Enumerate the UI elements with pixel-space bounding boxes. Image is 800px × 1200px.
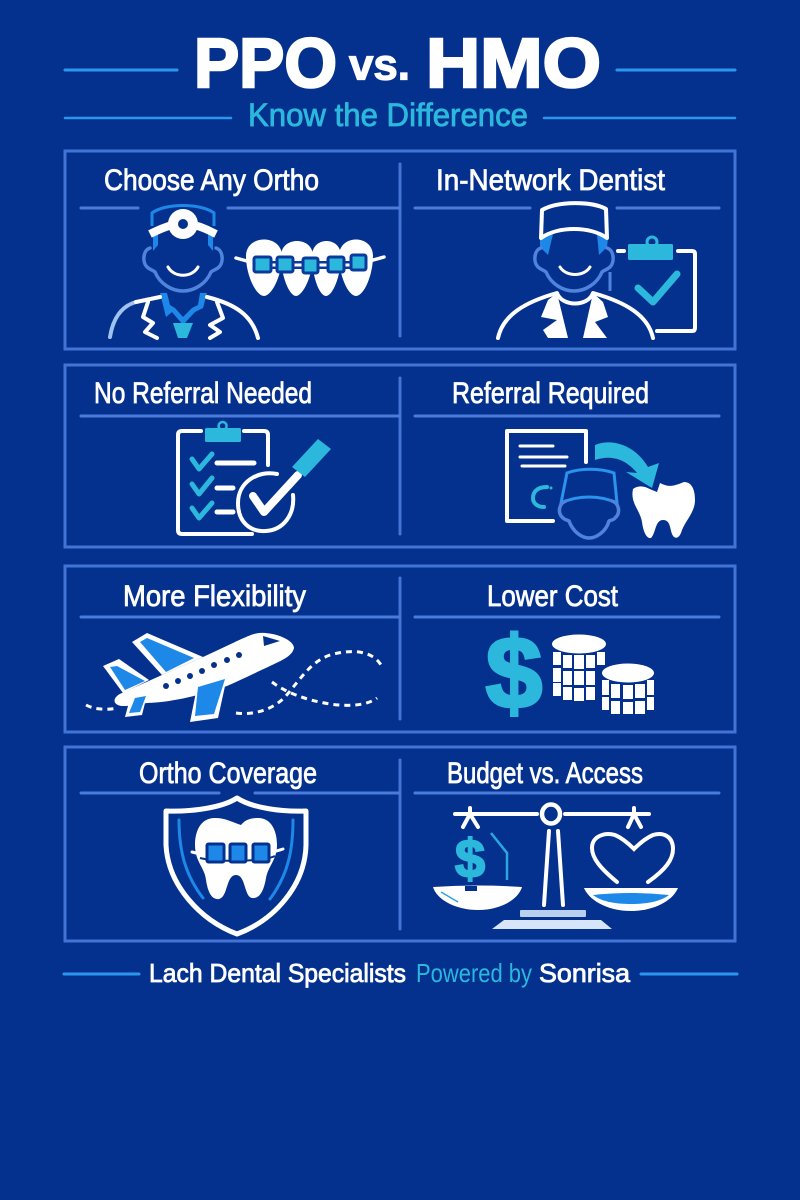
icon: dollar sign and coin stacks: $: [486, 616, 542, 730]
panel: referral: [65, 365, 735, 547]
heading: Ortho Coverage: Ortho Coverage: [139, 757, 317, 790]
title: vs.: [349, 40, 410, 90]
subtitle: Know the Difference: [248, 97, 528, 133]
icon: braces on teeth: [236, 240, 384, 296]
heading: Referral Required: Referral Required: [452, 377, 649, 410]
icon: shield with braced tooth: [166, 798, 306, 934]
icon: referral document, dentist, arrow and tooth: [507, 431, 695, 538]
icon: checklist clipboard with pen: [178, 422, 331, 534]
footer: Lach Dental Specialists: [149, 958, 406, 988]
title: HMO: [426, 24, 601, 102]
panel: coverage and budget: [65, 747, 735, 941]
icon: airplane with dashed flight path: [86, 633, 381, 722]
footer: Powered by: [416, 958, 532, 988]
heading: No Referral Needed: No Referral Needed: [94, 377, 312, 410]
icon: balance scale with dollar and heart: $: [455, 829, 485, 889]
footer: Sonrisa: [539, 958, 631, 988]
title: [65, 24, 735, 102]
panel: network choice: [65, 151, 735, 349]
heading: In-Network Dentist: In-Network Dentist: [436, 164, 666, 197]
icon: balance scale with dollar and heart: [433, 804, 678, 929]
icon: orthodontist with head mirror: [110, 206, 258, 338]
heading: Lower Cost: Lower Cost: [487, 580, 619, 613]
footer: [64, 958, 737, 988]
panel: flexibility and cost: [65, 566, 735, 732]
icon: in-network dentist with clipboard: [498, 203, 695, 338]
icon: dollar sign and coin stacks: [486, 616, 654, 730]
title: PPO: [194, 24, 337, 102]
heading: Budget vs. Access: Budget vs. Access: [447, 757, 643, 790]
heading: Choose Any Ortho: Choose Any Ortho: [104, 164, 319, 197]
heading: More Flexibility: More Flexibility: [123, 580, 306, 613]
